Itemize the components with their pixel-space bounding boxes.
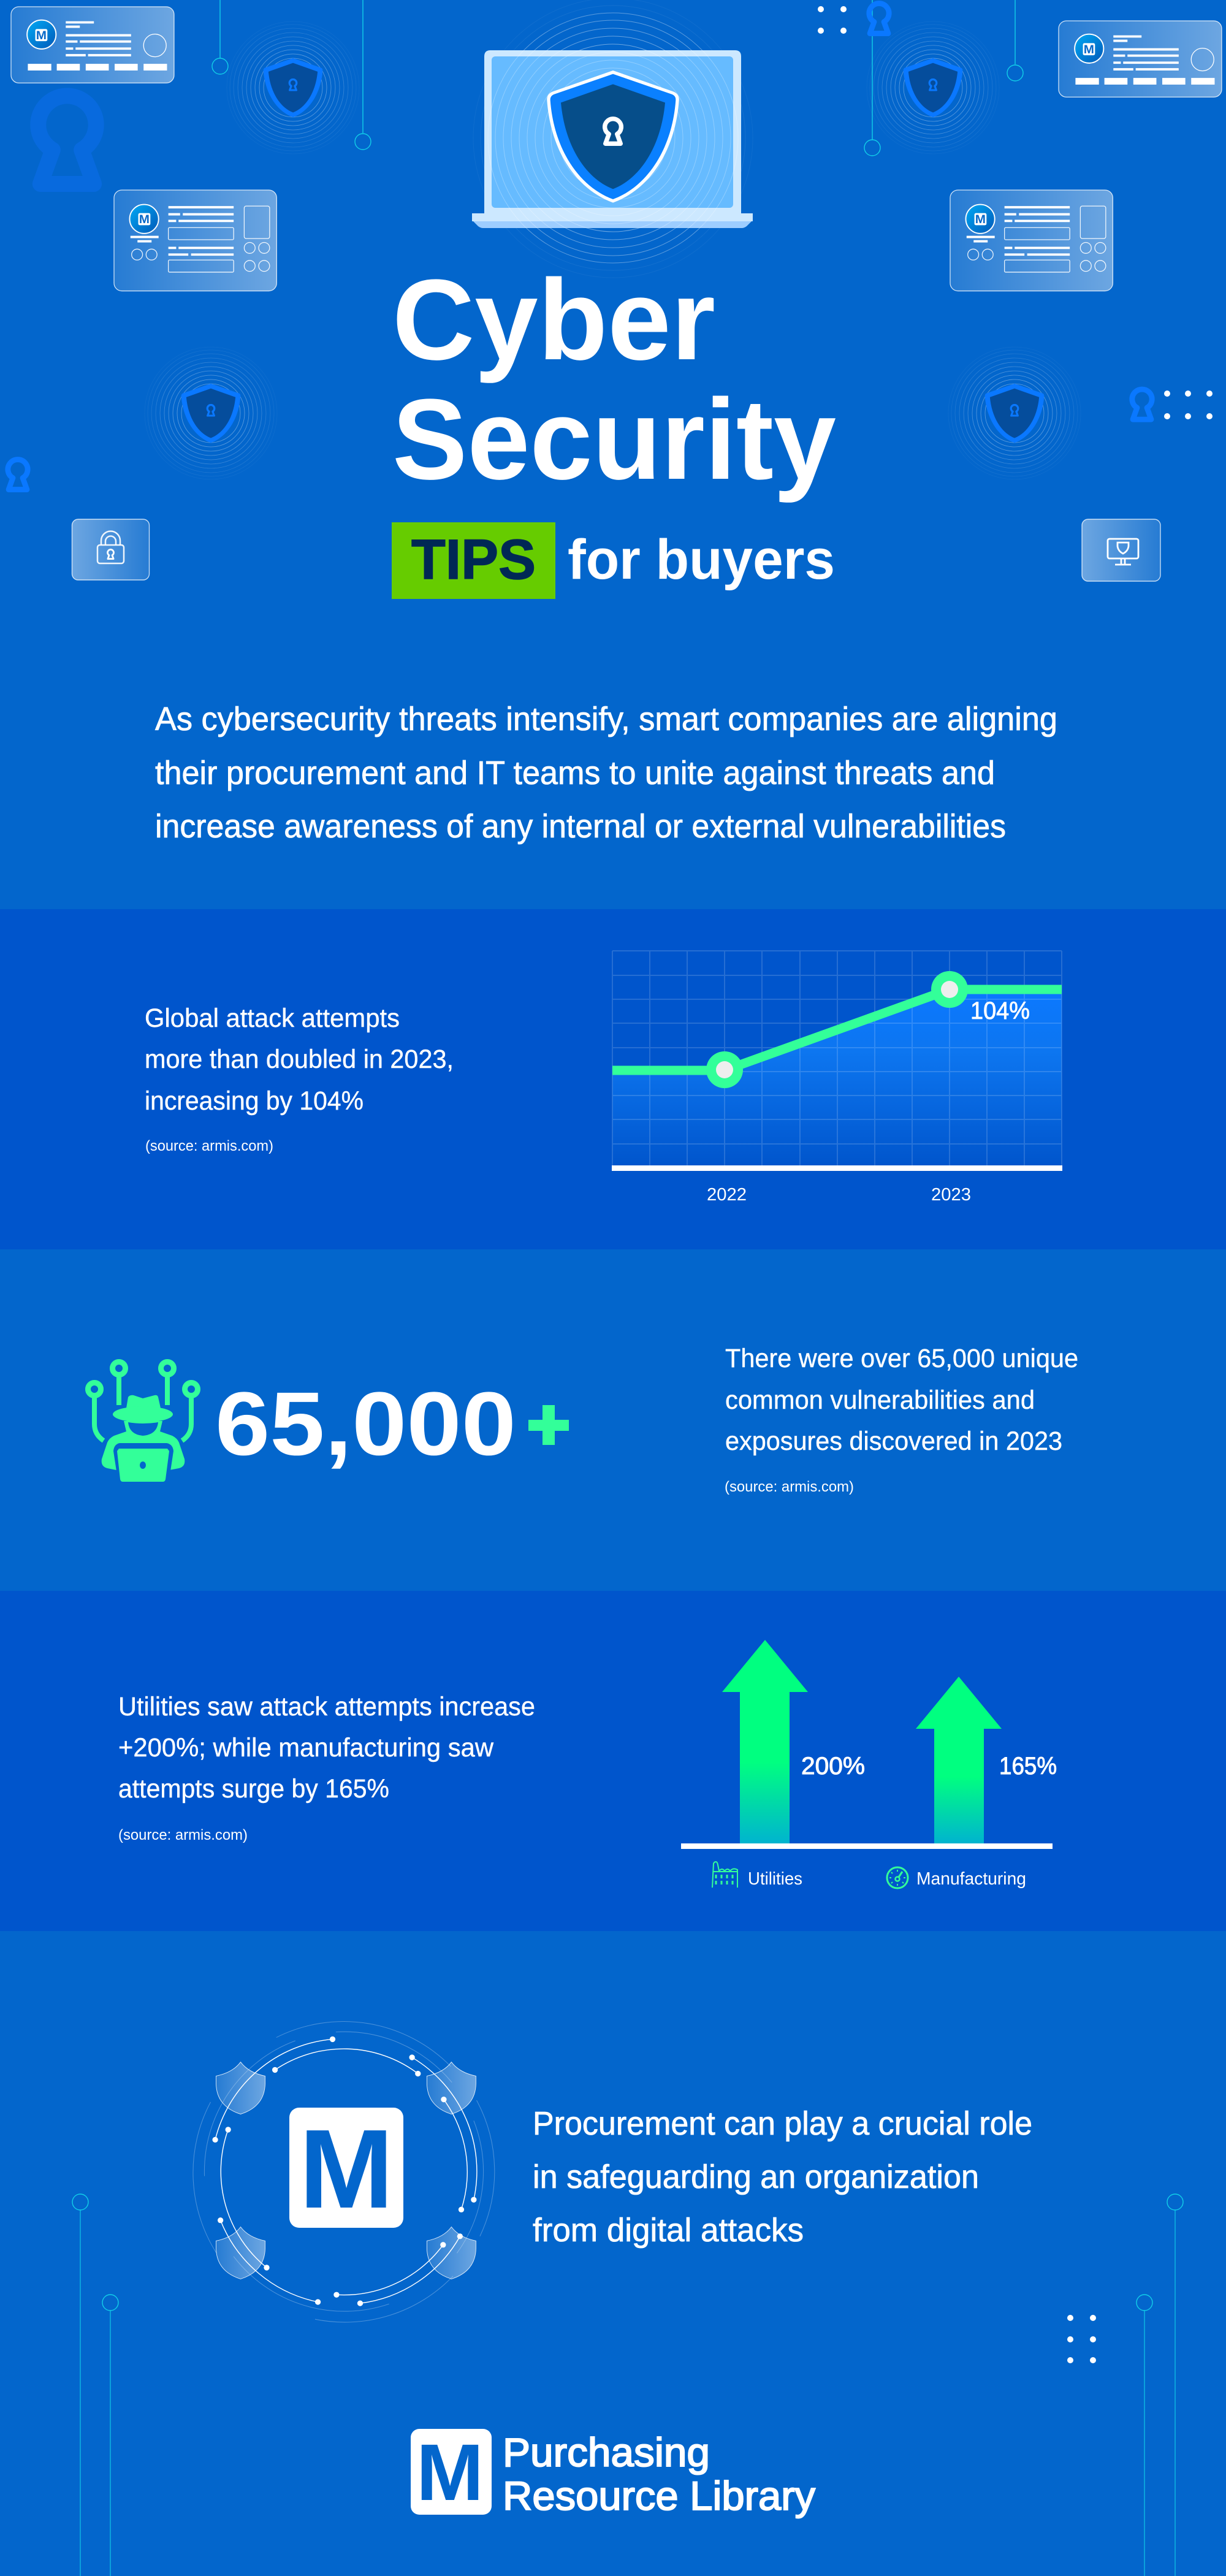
text: vulnerabilities: exposures discovered in 2023 [725, 1427, 1062, 1456]
plus sign [528, 1405, 569, 1445]
chart area fill [612, 989, 1062, 1167]
text: procurement role: from digital attacks [533, 2212, 804, 2249]
footer logo: Purchasing Resource Library: Resource Library [503, 2473, 815, 2518]
point 2022 [706, 1051, 743, 1088]
text: utilities and manufacturing: Utilities saw attack attempts increase [118, 1692, 535, 1721]
footer logo: Purchasing Resource Library [411, 2427, 815, 2518]
label: utilities: Utilities [748, 1869, 802, 1889]
chart line [612, 989, 1062, 1070]
circuit lines, bottom [72, 2194, 1183, 2576]
icon: shield with rings, lower right [948, 347, 1081, 479]
baseline [612, 1165, 1062, 1171]
label: manufacturing: Manufacturing [916, 1869, 1026, 1889]
text: utilities and manufacturing [118, 1692, 535, 1843]
text: global attack attempts: Global attack attempts [145, 1004, 400, 1033]
icon: gauge [887, 1867, 908, 1888]
footer logo: Purchasing Resource Library: Purchasing [503, 2429, 710, 2475]
icon: shield with rings, top right [867, 21, 999, 154]
arc dots [212, 2037, 476, 2306]
icon: logo in ring of shields [193, 2022, 495, 2322]
text: vulnerabilities: common vulnerabilities and [725, 1385, 1035, 1415]
panel: attack attempts band [0, 909, 1226, 1249]
icon: shield with rings, top left [227, 21, 359, 154]
intro paragraph [155, 701, 1057, 845]
logo: M square: M [299, 2106, 394, 2231]
baseline [681, 1843, 1053, 1849]
text: vulnerabilities: There were over 65,000 unique [725, 1344, 1078, 1373]
icon: small keyhole top right [869, 4, 889, 34]
text: utilities and manufacturing: (source: armis.com) [118, 1827, 248, 1843]
arrow: manufacturing [916, 1677, 1002, 1843]
icon: laptop with shield [472, 0, 753, 278]
text: procurement role: Procurement can play a crucial role [533, 2105, 1032, 2142]
subtitle: tips for buyers: for buyers [568, 528, 835, 591]
dots: right [1164, 391, 1213, 419]
text: vulnerabilities: (source: armis.com) [725, 1479, 854, 1495]
id card: middle right [950, 190, 1113, 291]
icon: small keyhole left [8, 460, 28, 490]
axis labels [707, 1185, 971, 1205]
text: vulnerabilities [725, 1344, 1078, 1495]
subtitle: tips for buyers [392, 522, 835, 599]
point 2023 [931, 971, 968, 1008]
text: global attack attempts [145, 1004, 454, 1154]
faint rings [193, 2022, 495, 2322]
value: 165%: 165% [999, 1753, 1057, 1780]
footer logo: Purchasing Resource Library: M [416, 2427, 484, 2517]
icon: shield with rings, lower left [145, 347, 277, 479]
arrow: utilities [722, 1640, 808, 1843]
intro paragraph: increase awareness of any internal or external vulnerabilities [155, 808, 1006, 845]
text: utilities and manufacturing: attempts surge by 165% [118, 1774, 389, 1804]
text: global attack attempts: more than doubled in 2023, [145, 1045, 454, 1074]
line chart: attacks 2022 to 2023 [612, 951, 1062, 1205]
value label: 104% [970, 997, 1030, 1024]
shields [216, 2062, 476, 2279]
id card: middle left [114, 190, 276, 291]
intro paragraph: their procurement and IT teams to unite against threats and [155, 755, 995, 791]
icon: monitor card [1082, 519, 1160, 581]
id card: top left [11, 7, 174, 83]
axis labels: 2023 [931, 1185, 971, 1205]
big number: 65,000+: 65,000 [215, 1374, 516, 1474]
icon: small keyhole right [1132, 389, 1152, 419]
intro paragraph: As cybersecurity threats intensify, smart companies are aligning [155, 701, 1057, 737]
text: utilities and manufacturing: +200%; while manufacturing saw [118, 1733, 494, 1762]
subtitle: tips for buyers: TIPS [411, 528, 536, 591]
text: procurement role [533, 2105, 1032, 2249]
text: global attack attempts: increasing by 104% [145, 1086, 364, 1116]
icon: factory [712, 1862, 737, 1888]
text: procurement role: in safeguarding an organization [533, 2159, 979, 2195]
title: Cyber [392, 256, 715, 384]
title: Security [392, 375, 836, 503]
value: 200%: 200% [801, 1753, 865, 1780]
text: global attack attempts: (source: armis.com) [145, 1138, 273, 1154]
icon: large faint keyhole [38, 96, 96, 184]
white arcs [215, 2039, 477, 2303]
icon: hacker [88, 1362, 197, 1482]
axis labels: 2022 [707, 1185, 747, 1205]
icon: padlock card [72, 519, 150, 580]
title [392, 256, 836, 503]
circuit lines, top [212, 0, 1023, 156]
arrow chart [681, 1640, 1057, 1889]
dots: bottom right [1067, 2315, 1096, 2363]
panel: utilities and manufacturing band [0, 1591, 1226, 1931]
id card: top right [1059, 21, 1222, 97]
dots: top [818, 6, 847, 34]
laptop body [484, 50, 741, 214]
